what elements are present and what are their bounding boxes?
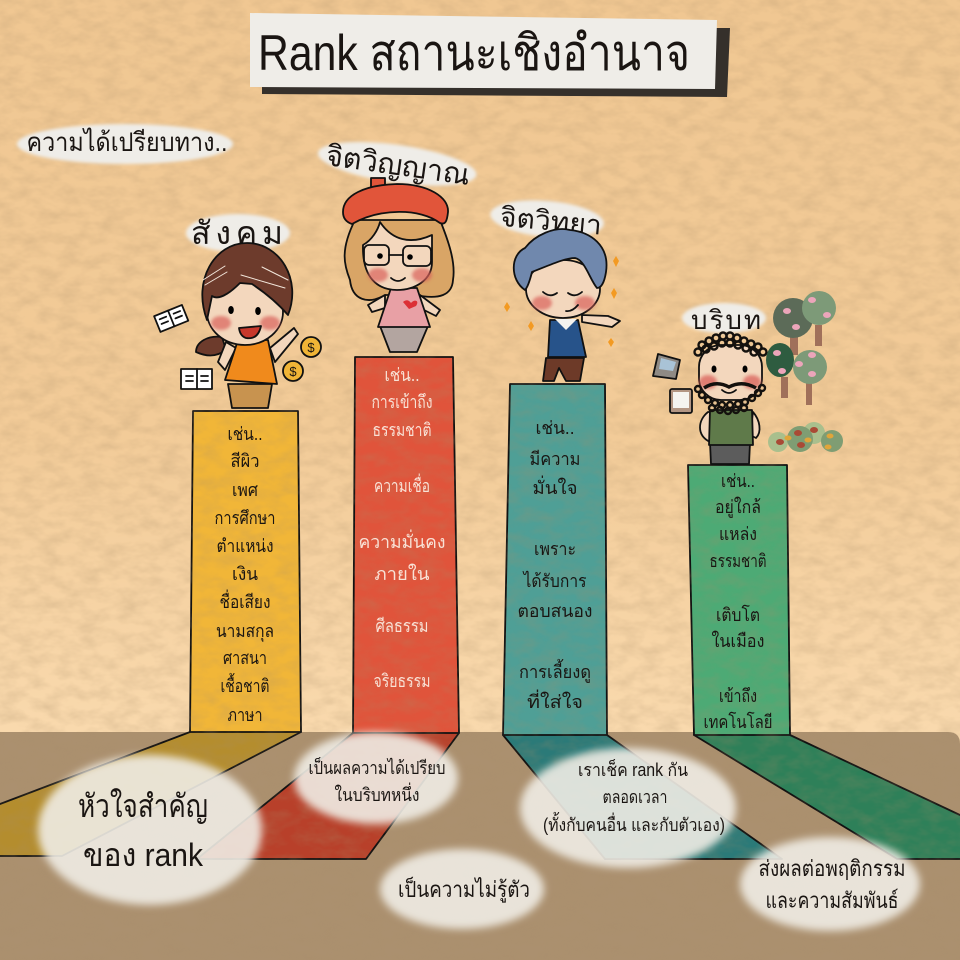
pillar: spirituality (red) <box>197 357 459 859</box>
face <box>207 279 283 345</box>
column: context <box>688 465 790 735</box>
column: psychology <box>503 384 607 735</box>
list: society examples <box>214 424 276 725</box>
list: society examples: ศาสนา <box>223 648 267 668</box>
note: result of advantage <box>308 756 446 805</box>
legs <box>228 384 272 408</box>
list: society examples: เงิน <box>232 564 258 584</box>
note: heart of rank: ของ rank <box>83 837 204 873</box>
character: context bearded man <box>653 291 843 464</box>
note: result of advantage: ในบริบทหนึ่ง <box>334 782 420 805</box>
list: society examples: เพศ <box>232 480 258 500</box>
list: spirituality examples: การเข้าถึง <box>372 392 432 412</box>
pillar: context (green) <box>688 465 960 859</box>
shadow: psychology <box>503 735 782 859</box>
title banner <box>250 13 730 97</box>
face <box>526 260 600 318</box>
list: psychology examples <box>518 418 592 712</box>
label: advantage in: ความได้เปรียบทาง.. <box>26 127 228 157</box>
note: unconscious: เป็นความไม่รู้ตัว <box>398 875 530 903</box>
label: context: บริบท <box>691 305 761 335</box>
list: society examples: ตำแหน่ง <box>216 536 274 556</box>
icon: coin: $ <box>307 340 315 355</box>
note: affects behaviour <box>758 856 906 913</box>
beret <box>343 178 448 224</box>
closed eyes and smile <box>543 292 582 311</box>
list: psychology examples: ที่ใส่ใจ <box>527 689 583 712</box>
list: context examples <box>704 471 772 732</box>
eyes and smile <box>712 366 748 393</box>
list: society examples: นามสกุล <box>216 621 274 642</box>
title text: Rank สถานะเชิงอำนาจ <box>258 25 690 81</box>
body: pink top <box>378 288 430 327</box>
face <box>699 345 762 400</box>
hair highlights <box>203 266 288 288</box>
list: psychology examples: มั่นใจ <box>532 475 578 498</box>
icon: open book <box>181 369 212 389</box>
floor note blobs <box>38 732 920 931</box>
list: context examples: แหล่ง <box>719 524 757 544</box>
list: spirituality examples <box>358 365 446 691</box>
body: blue waistcoat <box>548 320 586 357</box>
list: spirituality examples: ความมั่นคง <box>358 529 446 552</box>
character: society girl <box>154 243 321 408</box>
list: spirituality examples: ธรรมชาติ <box>372 420 432 440</box>
shadow: context <box>694 735 960 859</box>
list: spirituality examples: จริยธรรม <box>374 671 430 691</box>
icon: coin: $ <box>289 364 297 379</box>
list: society examples: การศึกษา <box>214 508 276 528</box>
pillar: society (yellow) <box>0 411 301 856</box>
note: we check rank: (ทั้งกับคนอื่น และกับตัวเอง) <box>543 812 725 835</box>
list: context examples: ในเมือง <box>712 630 764 651</box>
note: heart of rank <box>78 788 208 873</box>
icon: laptop <box>653 354 680 379</box>
beard <box>695 384 765 414</box>
glasses <box>364 245 431 281</box>
arms <box>700 412 760 442</box>
blush <box>532 296 595 310</box>
trees <box>766 291 836 405</box>
icon: coin <box>283 361 303 381</box>
sparkles <box>504 256 619 347</box>
label: psychology: จิตวิทยา <box>499 202 603 241</box>
list: context examples: เช่น.. <box>721 471 755 491</box>
blush <box>211 316 280 330</box>
curly hair <box>694 332 766 356</box>
list: spirituality examples: ความเชื่อ <box>374 473 430 496</box>
list: psychology examples: เพราะ <box>534 539 576 559</box>
arms <box>218 328 298 370</box>
hair <box>514 229 607 290</box>
note: affects behaviour: ส่งผลต่อพฤติกรรม <box>758 856 906 881</box>
list: society examples: เช่น.. <box>228 424 262 444</box>
note: we check rank: ตลอดเวลา <box>602 787 668 807</box>
list: psychology examples: ตอบสนอง <box>518 601 592 621</box>
collar <box>555 319 577 330</box>
list: psychology examples: มีความ <box>530 449 580 469</box>
list: spirituality examples: ศีลธรรม <box>376 616 428 636</box>
pants <box>543 358 584 381</box>
list: psychology examples: การเลี้ยงดู <box>519 659 591 683</box>
pants <box>710 443 750 464</box>
body: orange shirt <box>225 340 277 384</box>
note: we check rank: เราเช็ค rank กัน <box>578 758 688 780</box>
list: context examples: เทคโนโลยี <box>704 711 772 732</box>
icon: tablet <box>670 389 692 413</box>
list: society examples: สีผิว <box>230 451 260 471</box>
heart <box>403 300 417 309</box>
arm <box>582 315 620 327</box>
blush <box>368 268 432 282</box>
note: we check rank <box>543 758 725 835</box>
ponytail <box>196 337 226 356</box>
note: result of advantage: เป็นผลความได้เปรียบ <box>308 756 446 778</box>
hair <box>202 243 292 320</box>
icon: book <box>154 305 188 332</box>
eyes and mouth <box>228 306 261 338</box>
blush <box>699 375 761 389</box>
label: advantage in <box>17 124 233 164</box>
note: affects behaviour: และความสัมพันธ์ <box>766 888 898 913</box>
list: society examples: ชื่อเสียง <box>220 589 270 612</box>
list: context examples: อยู่ใกล้ <box>715 496 761 518</box>
list: society examples: เชื้อชาติ <box>220 673 270 696</box>
list: society examples: ภาษา <box>228 705 262 725</box>
column: spirituality <box>353 357 459 733</box>
list: context examples: เข้าถึง <box>719 686 757 706</box>
icon: coin <box>301 337 321 357</box>
floor <box>0 732 960 960</box>
list: psychology examples: เช่น.. <box>536 418 574 438</box>
list: spirituality examples: ภายใน <box>374 563 430 584</box>
hair <box>345 220 454 300</box>
note: heart of rank: หัวใจสำคัญ <box>78 788 208 824</box>
vest <box>709 410 753 445</box>
label: spirituality: จิตวิญญาณ <box>324 140 472 192</box>
shadow: spirituality <box>197 733 459 859</box>
list: context examples: เติบโต <box>716 604 760 625</box>
list: spirituality examples: เช่น.. <box>384 365 420 385</box>
character: psychology man <box>504 229 620 381</box>
list: psychology examples: ได้รับการ <box>522 570 587 591</box>
column: society <box>190 411 301 732</box>
pillar: psychology (teal) <box>503 384 782 859</box>
label: society: สังคม <box>191 215 283 251</box>
face <box>363 222 432 290</box>
shadow: society <box>0 732 301 856</box>
list: context examples: ธรรมชาติ <box>710 551 766 571</box>
character: spirituality woman <box>343 178 454 352</box>
bushes <box>768 422 843 452</box>
pants <box>380 326 428 352</box>
arms <box>368 295 440 316</box>
